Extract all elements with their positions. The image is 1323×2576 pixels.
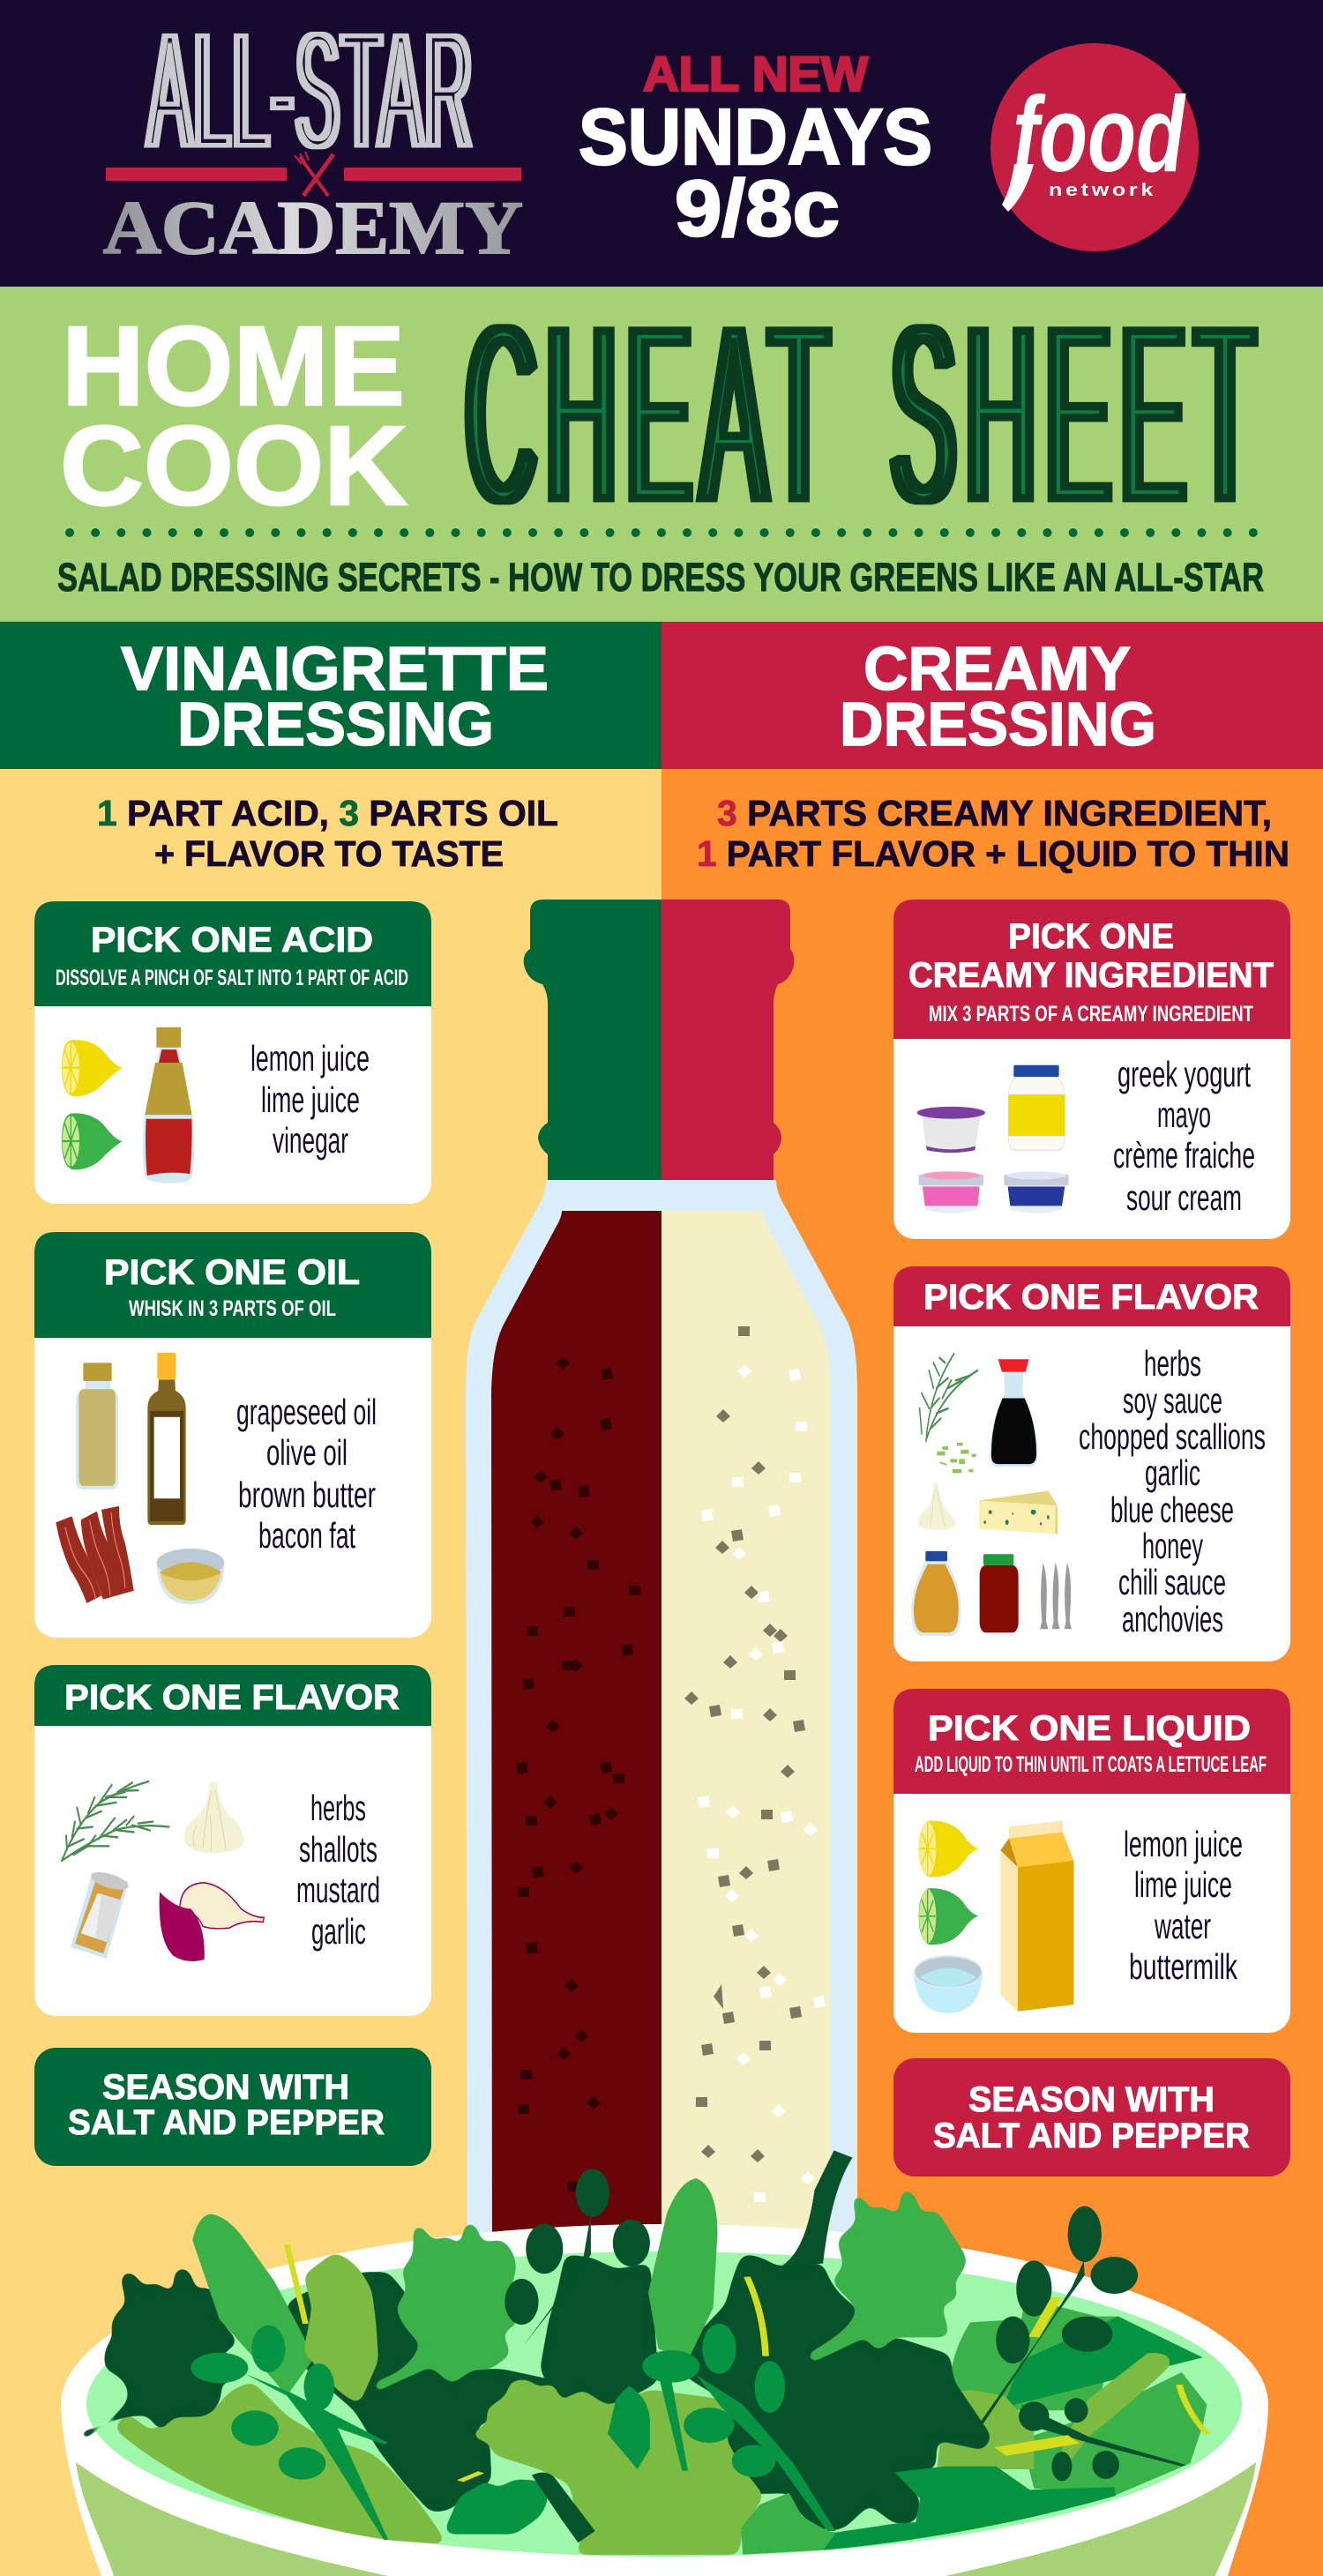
icon: garlic: [918, 1483, 956, 1530]
bowl outer, right: [946, 2462, 1256, 2576]
card body: [893, 1689, 1290, 2033]
ingredient list: shallots: [299, 1829, 377, 1870]
card: pick one liquid: [893, 1689, 1290, 2033]
leaves: dark centre-left: [287, 2273, 557, 2512]
ingredient list: garlic: [311, 1911, 366, 1952]
icons: herbs, garlic, mustard, shallot: [62, 1781, 264, 1961]
leaves: dark centre: [540, 2255, 658, 2406]
card: pick one flavor (creamy): [893, 1266, 1290, 1661]
card header: [893, 900, 1290, 1039]
background: left column: [0, 769, 662, 2576]
ingredient list: mustard: [296, 1870, 380, 1910]
ingredient list: [296, 1788, 380, 1952]
ingredient list: [1113, 1054, 1255, 1218]
callout line two: SALT AND PEPPER: [68, 2103, 385, 2142]
card header: [34, 1665, 431, 1726]
title: cook: COOK: [60, 403, 407, 529]
bowl outer, left: [76, 2462, 388, 2576]
leaves: green right: [806, 2190, 967, 2363]
ingredient list: water: [1154, 1906, 1211, 1946]
heading line two: CREAMY INGREDIENT: [908, 956, 1274, 995]
logo divider: [106, 168, 521, 181]
bottle illustration: [466, 900, 857, 2293]
ingredient list: chili sauce: [1118, 1562, 1226, 1602]
ingredient list: [250, 1038, 370, 1161]
leaves: olive blade right: [1055, 2353, 1170, 2481]
background: right column: [662, 769, 1323, 2576]
icon: sour cream tub: [1004, 1171, 1069, 1213]
leaves: long green blade: [192, 2214, 312, 2396]
leaves: bottom left deep green: [443, 2480, 549, 2534]
callout line one: SEASON WITH: [968, 2080, 1215, 2119]
ingredient list: mayo: [1157, 1094, 1211, 1135]
icons: tubs and jar: [917, 1065, 1069, 1213]
leaves: dark left: [78, 2268, 253, 2441]
card header: [34, 901, 431, 1006]
creamy liquid: [662, 1211, 831, 2293]
icons: lemon, lime, vinegar: [62, 1027, 194, 1183]
logo: All-Star Academy: [103, 0, 523, 270]
ingredient list: [236, 1392, 377, 1556]
card header: [34, 1232, 431, 1338]
pepper flakes in vinaigrette: [516, 1356, 640, 2191]
ratio line two: + FLAVOR TO TASTE: [154, 833, 504, 874]
card body: [34, 1232, 431, 1638]
ingredient list: anchovies: [1122, 1599, 1223, 1639]
leaves: bottom right green: [823, 2467, 1116, 2550]
ratio line one: 1 PART ACID, 3 PARTS OIL: [97, 793, 558, 833]
ingredient list: soy sauce: [1123, 1380, 1222, 1421]
salt flakes in creamy dressing: [698, 1364, 826, 2202]
card body: [34, 901, 431, 1204]
ingredient list: honey: [1142, 1526, 1203, 1566]
heading line one: CREAMY: [863, 634, 1131, 703]
heading: PICK ONE OIL: [104, 1253, 360, 1292]
callout: season creamy: [893, 2058, 1290, 2177]
ratio: vinaigrette: [97, 793, 558, 874]
heading line two: DRESSING: [177, 690, 494, 758]
logo word: network: network: [1049, 181, 1156, 200]
background: top band: [0, 0, 1323, 287]
ingredient list: [1124, 1824, 1243, 1987]
card: pick one oil: [34, 1232, 431, 1638]
background: green title band: [0, 287, 1323, 622]
logo wordmark: academy: ACADEMY: [103, 185, 523, 270]
dotted divider: [70, 528, 1253, 537]
logo: food network: [990, 43, 1199, 251]
bowl opening: [86, 2251, 1242, 2557]
ingredient list: buttermilk: [1129, 1946, 1237, 1987]
card body: [893, 1266, 1290, 1661]
leaves: dark bottom blade: [532, 2473, 595, 2542]
icon: rosemary: [920, 1354, 977, 1441]
icon: bowl of water: [914, 1955, 983, 2013]
icon: mustard jar: [71, 1869, 130, 1959]
ingredient list: blue cheese: [1110, 1490, 1234, 1530]
icon: buttermilk carton: [1000, 1821, 1073, 2012]
ingredient list: olive oil: [266, 1432, 348, 1473]
sprig: right dark: [979, 2206, 1186, 2481]
icon: lemon: [919, 1821, 978, 1878]
icon: rosemary: [62, 1781, 169, 1861]
card body: [893, 900, 1290, 1239]
card: pick one acid: [34, 901, 431, 1204]
time label: 9/8c: [675, 165, 840, 253]
icon: crossed fork and knife: [295, 152, 333, 196]
bottle cap: red half: [662, 900, 794, 1180]
ingredient list: garlic: [1145, 1452, 1200, 1493]
icon: mayo jar: [1008, 1065, 1065, 1150]
heading: PICK ONE FLAVOR: [923, 1278, 1259, 1317]
icon: olive oil bottle: [147, 1353, 186, 1525]
leaves: olive tall: [304, 2253, 378, 2405]
icon: vinegar bottle: [143, 1027, 194, 1183]
leaves: bottom centre-right green: [741, 2493, 835, 2555]
callout box: [893, 2058, 1290, 2177]
icon: chili sauce jar: [980, 1554, 1019, 1632]
icon: garlic: [183, 1782, 243, 1853]
ingredient list: lemon juice: [1124, 1824, 1243, 1864]
column header: vinaigrette: [0, 622, 662, 769]
heading line two: DRESSING: [840, 690, 1156, 758]
icon: blue cheese: [979, 1491, 1058, 1534]
leaves: small centre leaf: [608, 2386, 650, 2469]
ingredient list: sour cream: [1126, 1177, 1242, 1218]
icon: soy sauce bottle: [990, 1359, 1038, 1467]
heading: PICK ONE LIQUID: [928, 1709, 1251, 1748]
ingredient list: grapeseed oil: [236, 1392, 377, 1432]
card: pick one flavor (vinaigrette): [34, 1665, 431, 2016]
instruction: WHISK IN 3 PARTS OF OIL: [129, 1296, 336, 1321]
ingredient list: [1079, 1343, 1266, 1639]
heading: PICK ONE ACID: [91, 921, 373, 959]
card header: [893, 1689, 1290, 1794]
icons: flavor ingredients: [911, 1354, 1072, 1636]
sprig: centre deep green: [642, 2324, 835, 2531]
sundays label: SUNDAYS: [579, 93, 932, 182]
ratio line two: 1 PART FLAVOR + LIQUID TO THIN: [697, 833, 1289, 874]
icon: grapeseed oil jar: [76, 1363, 118, 1490]
header band: [662, 622, 1323, 769]
icon: yogurt tub: [917, 1107, 985, 1153]
leaves: dark right: [684, 2255, 991, 2531]
card: pick one creamy ingredient: [893, 900, 1290, 1239]
icon: shallot: [160, 1883, 264, 1961]
title: home: HOME: [62, 303, 405, 429]
leaves: back right greens: [937, 2296, 1207, 2496]
ingredient list: herbs: [1144, 1343, 1201, 1384]
ratio line one: 3 PARTS CREAMY INGREDIENT,: [717, 793, 1272, 833]
bowl rim and wall: [61, 2224, 1268, 2576]
ingredient list: vinegar: [273, 1120, 348, 1161]
icon: bacon: [56, 1506, 134, 1603]
bottle cap: green half: [524, 900, 662, 1180]
ratio: creamy: [697, 793, 1289, 874]
yellow dressing slivers: [287, 2244, 1207, 2481]
card header: [893, 1266, 1290, 1326]
vinaigrette liquid: [491, 1211, 662, 2293]
callout line one: SEASON WITH: [102, 2068, 349, 2107]
leaves: green left-centre: [371, 2222, 519, 2394]
sprig: centre dark: [505, 2169, 650, 2346]
callout box: [34, 2048, 431, 2166]
ingredient list: bacon fat: [258, 1515, 355, 1556]
ingredient list: lime juice: [261, 1079, 360, 1120]
logo f tail: [1002, 164, 1034, 212]
icon: lime: [62, 1113, 122, 1169]
ingredient list: lemon juice: [250, 1038, 370, 1079]
airtime text: [579, 46, 932, 253]
title: [60, 273, 1265, 556]
salad bowl illustration: [61, 2150, 1268, 2576]
text: ALL-STAR: [148, 0, 475, 183]
leaves: tall dark blade: [781, 2150, 853, 2266]
callout line two: SALT AND PEPPER: [933, 2117, 1250, 2155]
icon: honey bear jar: [911, 1551, 960, 1636]
icons: oils and bacon: [56, 1353, 224, 1604]
logo disc: [990, 43, 1199, 251]
icon: anchovies: [1040, 1563, 1072, 1629]
sprig: left deep green: [191, 2326, 388, 2540]
instruction: DISSOLVE A PINCH OF SALT INTO 1 PART OF ACID: [56, 966, 408, 990]
icon: lemon: [62, 1040, 122, 1096]
callout: season vinaigrette: [34, 2048, 431, 2166]
column header: creamy: [662, 622, 1323, 769]
icon: creme fraiche tub: [919, 1171, 983, 1213]
all new label: ALL NEW: [643, 46, 868, 101]
heading: PICK ONE FLAVOR: [64, 1678, 400, 1717]
bottle glass: [466, 1180, 857, 2293]
ingredient list: herbs: [310, 1788, 366, 1828]
heading line one: PICK ONE: [1008, 917, 1174, 956]
ingredient list: lime juice: [1134, 1864, 1232, 1905]
leaves: centre blade: [648, 2178, 717, 2361]
logo word: food: food: [1013, 74, 1186, 194]
icon: bowl of brown butter: [157, 1549, 224, 1604]
ingredient list: greek yogurt: [1117, 1054, 1251, 1094]
icons: liquids: [914, 1821, 1073, 2013]
leaves: olive centre: [468, 2379, 764, 2555]
leaves: olive left: [114, 2383, 447, 2544]
ingredient list: brown butter: [238, 1475, 376, 1515]
heading line one: VINAIGRETTE: [121, 634, 549, 703]
salad leaves: [78, 2150, 1207, 2555]
header band: [0, 622, 662, 769]
card body: [34, 1665, 431, 2016]
icon: lime: [919, 1888, 978, 1945]
pepper flakes in creamy dressing: [684, 1326, 805, 2162]
icon: chopped scallions: [937, 1443, 976, 1473]
